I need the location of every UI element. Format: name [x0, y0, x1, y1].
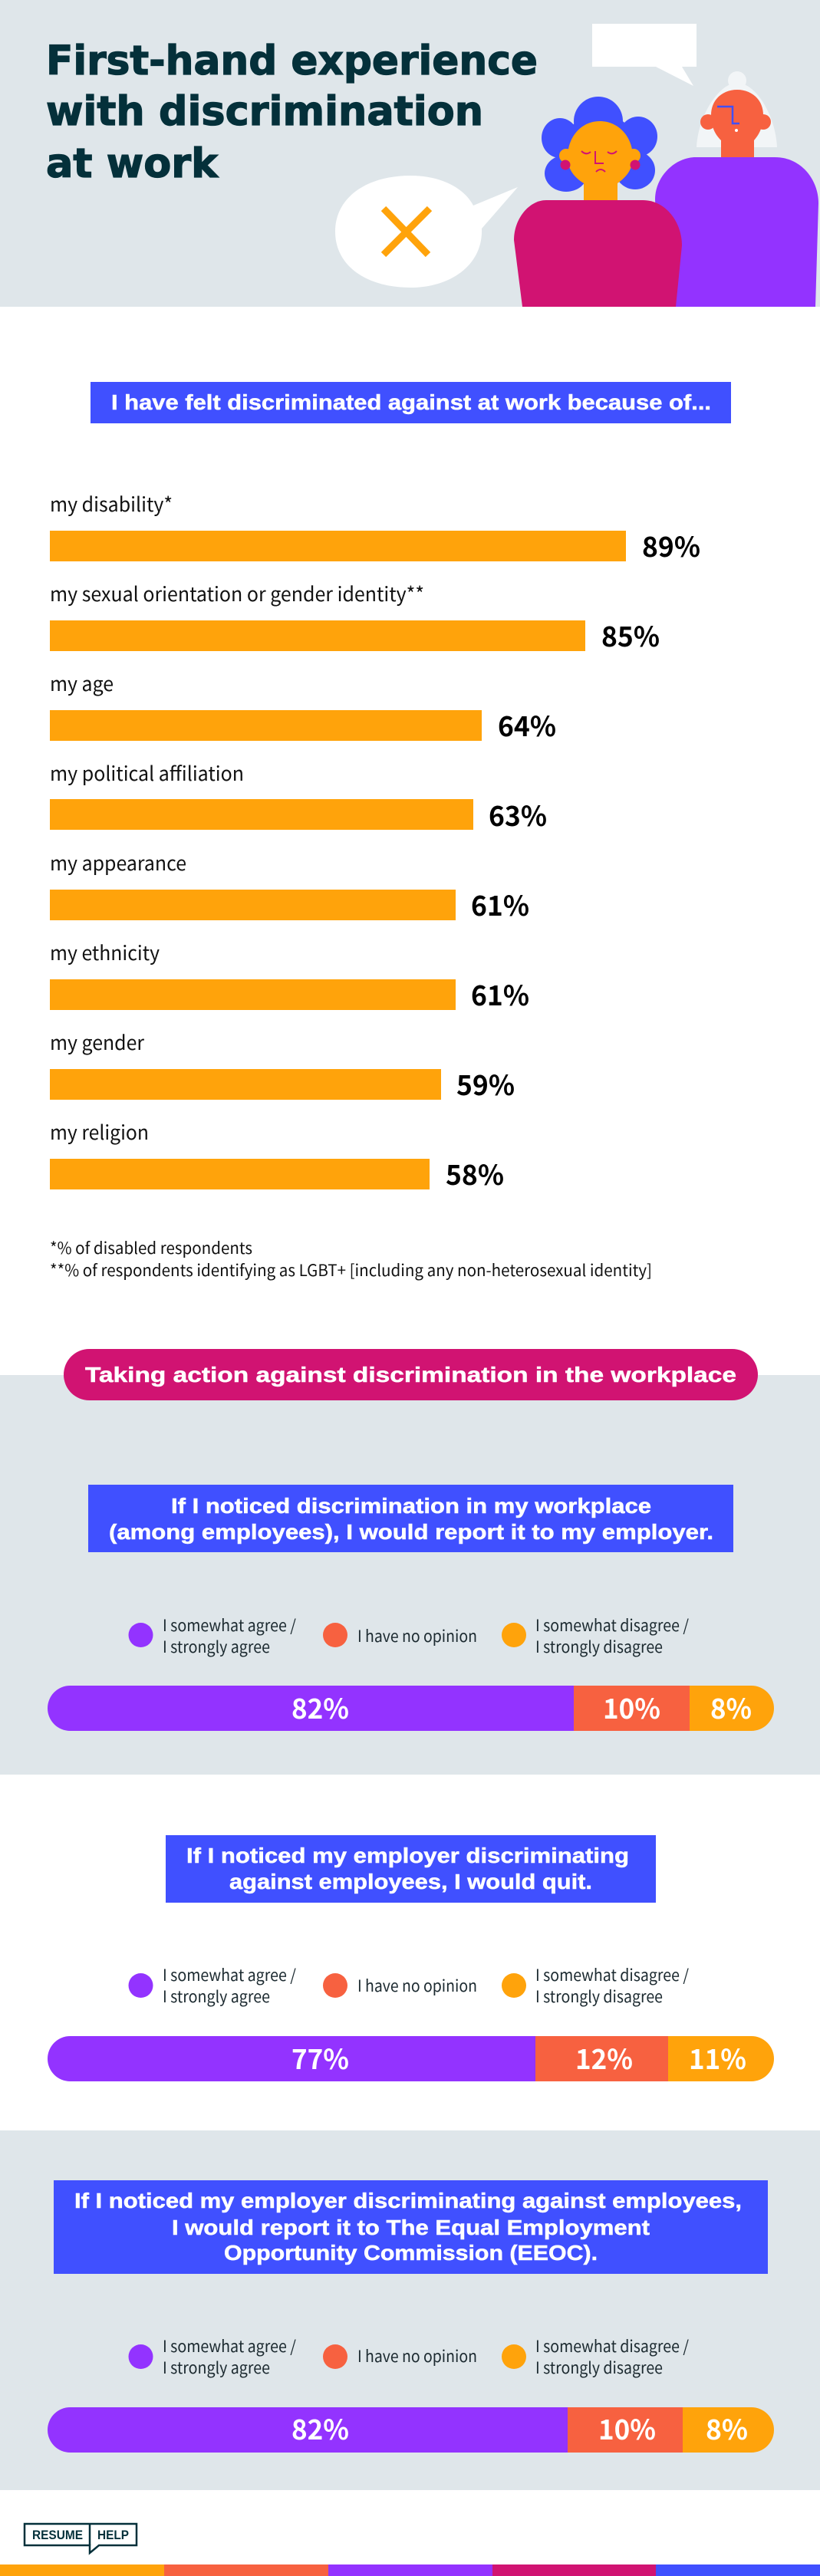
panel: discrimination bar chart	[50, 382, 731, 1281]
bar: my ethnicity: 61%	[471, 974, 529, 1014]
legend: I strongly agree	[163, 1985, 270, 2008]
legend: I have no opinion	[357, 2344, 477, 2367]
stacked bar: 8%	[706, 2408, 748, 2448]
legend: I somewhat disagree /	[535, 2334, 689, 2357]
logo: Resume Help: HELP	[97, 2528, 129, 2542]
footnotes: **% of respondents identifying as LGBT+ [including any non-heterosexual identity]	[50, 1258, 652, 1281]
question heading: Opportunity Commission (EEOC).	[224, 2241, 598, 2265]
question heading: If I noticed discrimination in my workplace	[171, 1494, 651, 1518]
illustration: back person	[655, 71, 818, 307]
bar: my religion: 58%	[446, 1153, 504, 1193]
heading	[91, 382, 731, 423]
legend	[129, 1614, 689, 1658]
question heading: (among employees), I would report it to my employer.	[109, 1520, 713, 1544]
stacked bar: 10%	[598, 2408, 656, 2448]
bar: my disability	[50, 489, 700, 565]
stacked bar: 8%	[710, 1687, 752, 1727]
stacked bar: 11%	[689, 2038, 746, 2078]
legend: I somewhat agree /	[163, 1614, 296, 1637]
stacked bar: 12%	[575, 2038, 633, 2078]
bar: my sexual orientation or gender identity	[50, 579, 660, 655]
stacked bar: 10%	[603, 1687, 660, 1727]
question heading: If I noticed my employer discriminating	[186, 1844, 629, 1867]
bar: my disability: 89%	[642, 525, 700, 565]
question heading	[54, 2180, 768, 2274]
bar: my gender	[50, 1028, 515, 1104]
section heading pill	[64, 1349, 758, 1400]
bar: my disability: my disability*	[50, 489, 173, 518]
footer colour stripes	[0, 2564, 820, 2576]
legend: I strongly agree	[163, 1635, 270, 1658]
bar: my ethnicity	[50, 938, 529, 1014]
legend: I somewhat agree /	[163, 1963, 296, 1986]
stacked bar: 82%	[291, 2408, 349, 2448]
bar: my political affiliation: my political affiliation	[50, 758, 244, 787]
panel: would quit	[48, 1835, 774, 2081]
bar: my appearance: 61%	[471, 884, 529, 924]
legend: I strongly agree	[163, 2356, 270, 2379]
panel: report to EEOC	[0, 2130, 820, 2490]
footnotes	[50, 1236, 652, 1281]
question heading: If I noticed my employer discriminating against employees,	[74, 2189, 742, 2212]
legend: I strongly disagree	[535, 1635, 663, 1658]
bar: my appearance: my appearance	[50, 848, 186, 877]
panel: report to employer	[0, 1349, 820, 1775]
legend: I somewhat disagree /	[535, 1614, 689, 1637]
stacked bar	[48, 2036, 774, 2081]
legend: I somewhat agree /	[163, 2334, 296, 2357]
stacked bar: 77%	[291, 2038, 349, 2078]
bar: my sexual orientation or gender identity: 85%	[601, 615, 660, 655]
legend	[129, 2334, 689, 2379]
question heading: I would report it to The Equal Employment	[172, 2216, 650, 2239]
bar: my sexual orientation or gender identity: my sexual orientation or gender identity**	[50, 579, 424, 607]
bar: my political affiliation: 63%	[489, 795, 547, 834]
legend: I have no opinion	[357, 1624, 477, 1647]
heading: I have felt discriminated against at work because of...	[111, 390, 711, 414]
legend: I strongly disagree	[535, 2356, 663, 2379]
title: with discrimination	[46, 88, 483, 135]
bar: my religion	[50, 1117, 504, 1193]
section heading pill: Taking action against discrimination in the workplace	[85, 1363, 736, 1387]
bar: my political affiliation	[50, 758, 547, 834]
icon: speech bubble with cross	[335, 176, 518, 288]
bar: my age: 64%	[498, 705, 556, 745]
logo: Resume Help: RESUME	[32, 2528, 83, 2542]
legend: I strongly disagree	[535, 1985, 663, 2008]
illustration: front person	[514, 97, 682, 307]
bar: my gender: 59%	[456, 1064, 515, 1104]
stacked bar	[48, 2407, 774, 2453]
question heading	[88, 1485, 733, 1552]
question heading	[166, 1835, 656, 1903]
question heading: against employees, I would quit.	[229, 1870, 592, 1893]
icon: rectangular speech bubble	[592, 24, 697, 86]
logo: Resume Help	[25, 2524, 137, 2553]
title: at work	[46, 140, 219, 187]
bar: my ethnicity: my ethnicity	[50, 938, 160, 966]
bar: my appearance	[50, 848, 529, 924]
legend	[129, 1963, 689, 2008]
bar: my age: my age	[50, 669, 114, 697]
stacked bar	[48, 1686, 774, 1731]
stacked bar: 82%	[291, 1687, 349, 1727]
legend: I somewhat disagree /	[535, 1963, 689, 1986]
header panel	[0, 0, 820, 307]
footnotes: *% of disabled respondents	[50, 1236, 252, 1259]
title: First-hand experience	[46, 38, 538, 84]
bar: my age	[50, 669, 556, 745]
bar: my gender: my gender	[50, 1028, 145, 1056]
title	[46, 38, 538, 187]
legend: I have no opinion	[357, 1974, 477, 1997]
bar: my religion: my religion	[50, 1117, 149, 1146]
